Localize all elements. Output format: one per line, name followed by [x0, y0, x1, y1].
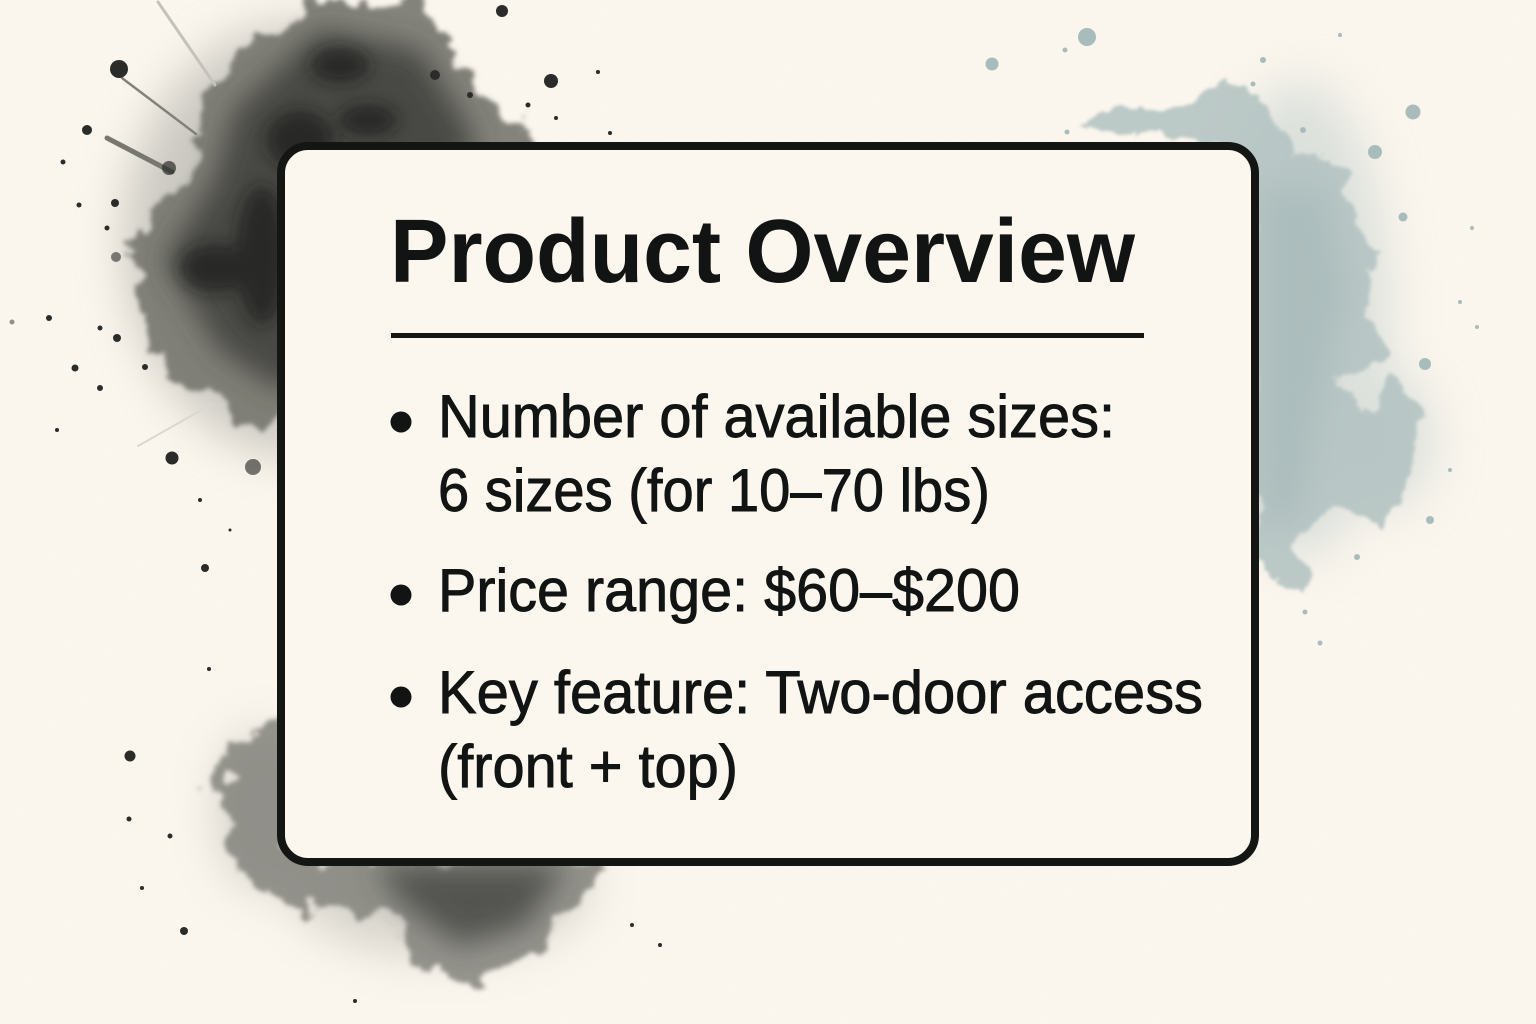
bullet 3: key feature: (front + top) — [438, 733, 738, 800]
blue-grey speckles — [986, 28, 1479, 646]
dark ink splash: lower left — [212, 715, 610, 985]
bullet 3: key feature — [390, 659, 1203, 800]
title: Product Overview — [390, 202, 1136, 302]
title divider — [391, 333, 1144, 338]
bullet 3: key feature: Key feature: Two-door access — [438, 659, 1203, 726]
ink streaks — [107, 2, 215, 446]
bullet 1: available sizes — [390, 383, 1115, 524]
card panel — [281, 146, 1255, 862]
product overview card — [281, 146, 1255, 862]
dark speckles — [10, 5, 662, 1003]
bullet 1: available sizes: Number of available sizes: — [438, 383, 1115, 450]
blue-grey watercolor splash: right — [1085, 78, 1435, 590]
dark ink splash: upper left — [125, 0, 545, 455]
bullet 2: price range: Price range: $60–$200 — [438, 557, 1020, 624]
bullet 1: available sizes: 6 sizes (for 10–70 lbs) — [438, 457, 990, 524]
